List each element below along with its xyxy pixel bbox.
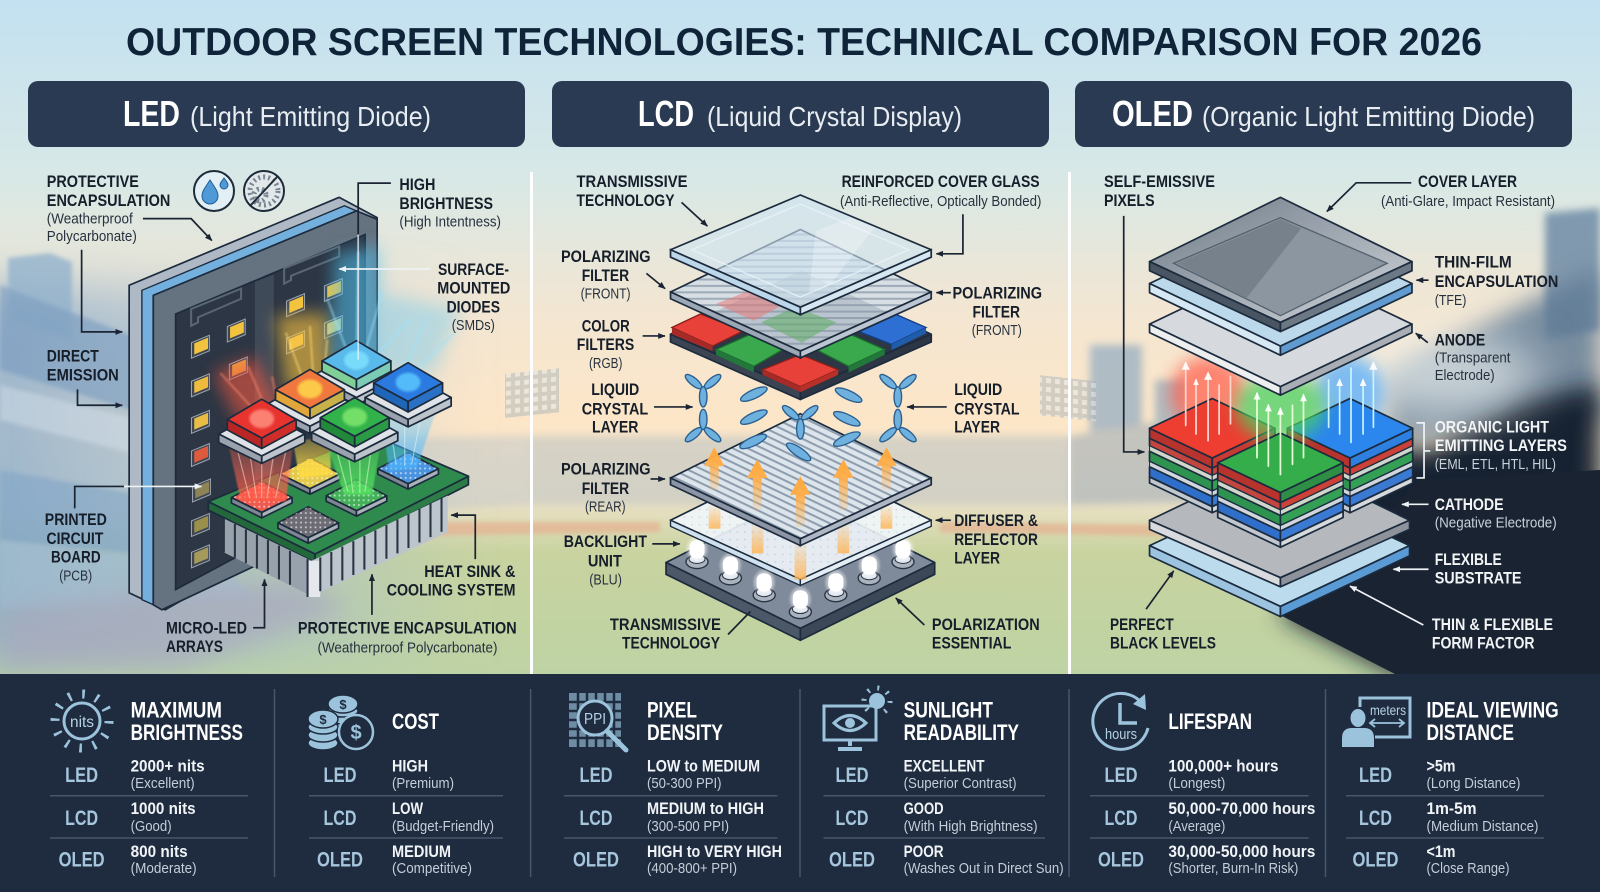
heading: COST [392,709,439,734]
label: cathode: CATHODE [1435,495,1504,514]
label: self-emissive pixels: SELF-EMISSIVE [1104,172,1215,191]
label: transmissive technology top [576,172,688,210]
row: LCD: (Average) [1168,818,1225,835]
heading: SUNLIGHT [904,697,993,722]
illustration: LED screen module [129,197,468,610]
label: diffuser and reflector [954,511,1038,568]
illustration: OLED exploded stack [1150,197,1413,617]
label: polarizing filter front left: (FRONT) [581,286,631,303]
row: LCD: (Medium Distance) [1426,818,1538,835]
heading [904,697,1019,745]
row: LED [580,758,760,792]
label: color filters: FILTERS [577,335,634,354]
icon: coins: $ [350,722,362,744]
heading: PIXEL [647,697,697,722]
icon: clock with hours: hours [1105,726,1137,743]
row: LED: 2000+ nits [131,758,205,776]
row: LCD: (With High Brightness) [904,818,1038,835]
row: LED: (Superior Contrast) [904,775,1017,792]
row: LCD [836,800,1038,835]
row: OLED: (Competitive) [392,860,472,877]
label: surface-mounted diodes: DIODES [447,297,500,316]
row: LCD [324,800,494,835]
label: polarizing filter front left: FILTER [582,266,629,285]
column: maximum brightness [55,694,243,877]
row: OLED: <1m [1426,843,1456,861]
label: backlight unit: BACKLIGHT [564,532,648,551]
row: LED: (Premium) [392,775,454,792]
row: LCD: LCD [65,807,98,830]
label: polarizing filter rear: POLARIZING [561,460,650,478]
heading: DISTANCE [1426,720,1514,745]
label: micro-LED arrays: ARRAYS [166,637,223,656]
label: cathode: (Negative Electrode) [1435,515,1557,532]
label: polarizing filter front left: POLARIZING [561,247,650,266]
label: perfect black levels: PERFECT [1110,615,1174,634]
label: protective encapsulation: PROTECTIVE [47,172,139,191]
row: LCD [65,800,196,835]
icon: coins: $ [339,697,347,712]
header: OLED: OLED [1112,93,1193,134]
row: LCD: 50,000-70,000 hours [1168,800,1315,818]
label: thin and flexible form factor: THIN & FLEXIBLE [1432,615,1553,634]
row: LED: LOW to MEDIUM [647,758,760,776]
label: flexible substrate [1435,550,1522,588]
label: protective encapsulation: (Weatherproof [47,211,134,228]
row: LED [324,758,454,792]
header: OLED [1075,81,1572,147]
row: LED [65,758,205,792]
row: LED: (Long Distance) [1426,775,1521,792]
icon: clock with hours [1093,693,1148,749]
column: pixel density [569,693,782,877]
label: anode: Electrode) [1435,367,1495,384]
label: organic light emitting layers: ORGANIC LIGHT [1435,417,1550,436]
row: OLED: POOR [904,843,944,861]
label: diffuser and reflector: REFLECTOR [954,530,1038,549]
label: thin-film encapsulation: (TFE) [1435,292,1466,309]
header: LED: (Light Emitting Diode) [190,101,431,132]
label: direct emission [47,346,119,385]
row: LED [1104,758,1278,792]
label: backlight unit [564,532,648,588]
label: color filters: COLOR [582,316,630,336]
label: thin and flexible form factor: FORM FACTOR [1432,634,1534,653]
label: flexible substrate: FLEXIBLE [1435,550,1502,569]
label: transmissive technology bottom: TRANSMISSIVE [610,615,721,634]
label: polarizing filter rear: (REAR) [585,499,626,516]
row: OLED [1098,843,1315,877]
row: OLED [829,843,1064,877]
label: color filters: (RGB) [589,355,622,372]
label: anode [1435,330,1511,384]
heading [1426,697,1559,745]
row: LCD: LOW [392,800,423,818]
column: cost [308,695,494,877]
row: LCD: LCD [1359,807,1392,830]
label: flexible substrate: SUBSTRATE [1435,569,1522,588]
icon: coins: $ [319,712,327,727]
row: LED: LED [836,764,868,787]
label: organic light emitting layers [1435,417,1567,473]
label: protective encapsulation: ENCAPSULATION [47,191,170,210]
icon: nits sun [55,694,109,748]
heading: IDEAL VIEWING [1426,697,1559,722]
label: high brightness: BRIGHTNESS [399,194,493,213]
row: LCD: GOOD [904,800,944,818]
heading [647,697,723,745]
row: LCD: 1m-5m [1426,800,1476,818]
label: high brightness: HIGH [399,175,435,194]
row: OLED: MEDIUM [392,843,451,861]
row: OLED: 800 nits [131,843,188,861]
row: OLED: OLED [1098,849,1144,872]
row: OLED: OLED [317,849,363,872]
row: LED: LED [324,764,356,787]
title: OUTDOOR SCREEN TECHNOLOGIES: TECHNICAL COMPARISON FOR 2026 [126,21,1482,64]
label: polarizing filter front right: FILTER [972,302,1020,321]
heading: MAXIMUM [131,697,222,722]
label: liquid crystal layer left: CRYSTAL [582,399,648,418]
label: self-emissive pixels: PIXELS [1104,191,1155,210]
label: polarizing filter rear [561,460,650,516]
label: direct emission: DIRECT [47,346,99,365]
label: cover layer: (Anti-Glare, Impact Resistant) [1381,193,1555,210]
heading [131,697,243,745]
label: diffuser and reflector: LAYER [954,548,1000,568]
label: organic light emitting layers: EMITTING LAYERS [1435,436,1567,455]
label: organic light emitting layers: (EML, ETL, HTL, HIL) [1435,456,1556,473]
comparison band [0,674,1600,892]
row: LED: LED [1359,764,1392,787]
row: LED: 100,000+ hours [1168,758,1278,776]
header: LCD: LCD [638,93,694,134]
row: OLED: (400-800+ PPI) [647,860,737,877]
label: printed circuit board: CIRCUIT [46,529,104,548]
column: lifespan [1093,693,1315,877]
header: LED [28,81,525,147]
label: perfect black levels [1110,615,1216,653]
label: protective encapsulation lower [298,618,517,657]
row: LCD: LCD [324,807,356,830]
row: OLED [573,843,782,877]
label: polarization essential [932,615,1040,653]
label: protective encapsulation: Polycarbonate) [47,228,137,245]
label: cover layer [1381,172,1555,210]
row: OLED: OLED [829,849,875,872]
label: self-emissive pixels [1104,172,1215,210]
icon: PPI magnifier [569,693,626,750]
row: LED: LED [580,764,612,787]
label: direct emission: EMISSION [47,366,119,385]
panel: OLED diagram [1104,172,1567,653]
label: reinforced cover glass: REINFORCED COVER GLASS [842,172,1040,191]
heading: DENSITY [647,720,723,745]
row: LCD: LCD [580,807,612,830]
label: liquid crystal layer right: CRYSTAL [954,399,1020,418]
label: anode: (Transparent [1435,349,1511,366]
row: LCD: LCD [836,807,868,830]
label: cathode [1435,495,1557,532]
label: polarizing filter rear: FILTER [582,479,629,498]
row: OLED: 30,000-50,000 hours [1168,843,1315,861]
icon: dust resistance [244,171,284,211]
label: polarizing filter front left [561,247,650,303]
label: thin-film encapsulation [1435,253,1558,309]
label: polarizing filter front right: POLARIZING [952,284,1042,303]
row: LCD [1104,800,1315,835]
label: liquid crystal layer right: LAYER [954,417,1000,436]
icon: coins [308,695,373,750]
label: heat sink: COOLING SYSTEM [387,581,516,600]
row: LED: >5m [1426,758,1456,776]
row: LED: EXCELLENT [904,758,985,776]
row: LCD [1359,800,1538,835]
label: liquid crystal layer left [582,380,648,436]
leader lines: LED [75,183,475,628]
header: LCD: (Liquid Crystal Display) [707,101,962,132]
row: OLED: HIGH to VERY HIGH [647,843,782,861]
label: high brightness [399,175,501,231]
label: liquid crystal layer left: LIQUID [591,380,639,399]
header: LCD [552,81,1049,147]
row: LCD: LCD [1104,807,1138,830]
panel: LCD diagram [561,172,1042,653]
label: protective encapsulation lower: PROTECTIVE ENCAPSULATION [298,618,517,637]
heading: BRIGHTNESS [131,720,243,745]
panel: LED diagram [45,171,517,657]
row: LCD: (Good) [131,818,172,835]
row: OLED: OLED [1352,849,1398,872]
row: OLED: OLED [573,849,619,872]
label: micro-LED arrays [166,618,247,656]
label: surface-mounted diodes [437,260,510,334]
row: OLED [1352,843,1510,877]
icon: monitor eye and sun [824,688,890,749]
row: OLED [59,843,197,877]
label: surface-mounted diodes: SURFACE- [438,260,509,279]
label: liquid crystal layer right [954,380,1020,436]
row: LED: (Longest) [1168,775,1225,792]
label: polarizing filter front right [952,284,1042,339]
header: LED: LED [123,93,180,134]
label: backlight unit: (BLU) [589,571,622,588]
label: liquid crystal layer left: LAYER [592,417,638,436]
column: sunlight readability [824,688,1064,877]
icon: person and meters board: meters [1370,702,1406,718]
label: liquid crystal layer right: LIQUID [954,380,1002,399]
label: reinforced cover glass: (Anti-Reflective, Optically Bonded) [840,193,1041,210]
row: LED: HIGH [392,758,428,776]
label: thin and flexible form factor [1432,615,1553,653]
label: surface-mounted diodes: MOUNTED [437,279,510,298]
label: color filters [577,316,634,372]
label: printed circuit board: BOARD [51,547,101,566]
icon: water resistance [194,171,234,211]
label: printed circuit board [45,510,107,584]
label: transmissive technology bottom: TECHNOLOGY [622,634,721,653]
row: OLED: OLED [59,849,105,872]
icon: PPI magnifier: PPI [584,711,606,728]
row: OLED: (Washes Out in Direct Sun) [904,860,1064,877]
row: OLED: (Shorter, Burn-In Risk) [1168,860,1298,877]
header: OLED: (Organic Light Emitting Diode) [1202,101,1535,132]
label: transmissive technology top: TRANSMISSIVE [576,172,688,191]
label: polarizing filter front right: (FRONT) [972,322,1022,339]
label: printed circuit board: (PCB) [59,567,92,584]
label: protective encapsulation [47,172,170,245]
column: ideal viewing distance [1342,697,1559,877]
row: LCD: (300-500 PPI) [647,818,729,835]
label: surface-mounted diodes: (SMDs) [452,317,495,334]
label: transmissive technology bottom [610,615,721,653]
label: heat sink: HEAT SINK & [424,562,516,581]
row: LED: (Excellent) [131,775,195,792]
heading: READABILITY [904,720,1019,745]
label: anode: ANODE [1435,330,1485,349]
label: printed circuit board: PRINTED [45,510,107,529]
row: LCD: 1000 nits [131,800,196,818]
icon: nits sun: nits [70,714,94,731]
label: high brightness: (High Intentness) [399,214,501,231]
row: LCD: MEDIUM to HIGH [647,800,764,818]
leader lines: OLED [1124,183,1430,625]
label: heat sink [387,562,516,600]
label: reinforced cover glass [840,172,1041,210]
row: LED [836,758,1017,792]
label: cover layer: COVER LAYER [1418,172,1517,191]
label: protective encapsulation lower: (Weatherproof Polycarbonate) [318,640,498,657]
leader lines: LCD [643,202,963,634]
label: backlight unit: UNIT [588,552,622,570]
label: thin-film encapsulation: THIN-FILM [1435,253,1512,272]
label: diffuser and reflector: DIFFUSER & [954,511,1038,530]
row: OLED [317,843,472,877]
label: thin-film encapsulation: ENCAPSULATION [1435,272,1558,291]
row: LCD [580,800,764,835]
label: polarization essential: POLARIZATION [932,615,1040,634]
illustration: LCD exploded stack [666,195,935,640]
icon: person and meters board [1342,698,1410,747]
row: OLED: (Moderate) [131,860,197,877]
row: LED: (50-300 PPI) [647,775,722,792]
label: perfect black levels: BLACK LEVELS [1110,634,1216,653]
label: micro-LED arrays: MICRO-LED [166,618,247,637]
label: polarization essential: ESSENTIAL [932,634,1011,653]
heading: LIFESPAN [1168,709,1252,734]
label: transmissive technology top: TECHNOLOGY [576,191,675,210]
row: LED: LED [65,764,98,787]
row: LED: LED [1104,764,1138,787]
row: LED [1359,758,1521,792]
row: LCD: (Budget-Friendly) [392,818,494,835]
row: OLED: (Close Range) [1426,860,1510,877]
